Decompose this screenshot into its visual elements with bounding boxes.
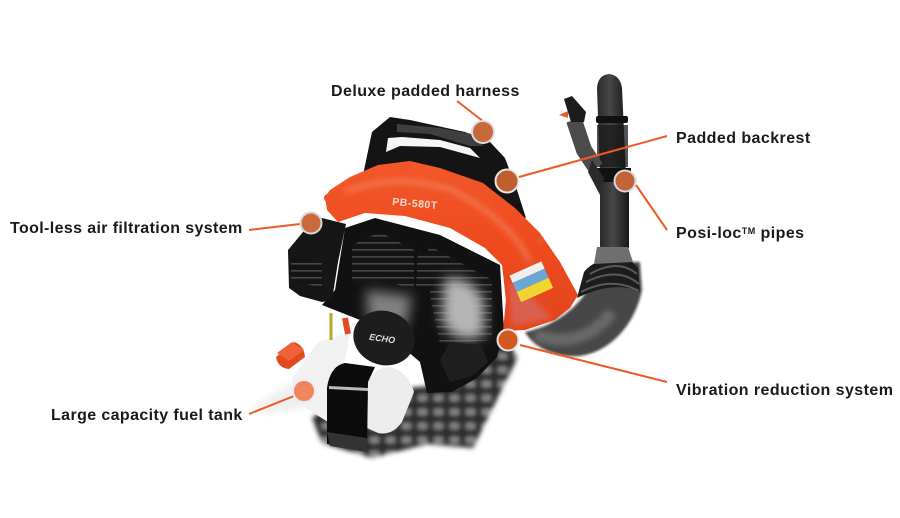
- fuel cap: [276, 342, 305, 369]
- engine shroud: [322, 218, 504, 393]
- warning label: [509, 261, 553, 302]
- callout: padded backrest: Padded backrest: [676, 130, 811, 147]
- callout: deluxe padded harness: Deluxe padded harness: [331, 83, 520, 100]
- callout: posi-loc pipes: TM: [742, 226, 756, 236]
- blower pipe and flexible elbow: [525, 74, 642, 356]
- callout: deluxe padded harness: [331, 83, 520, 143]
- callout: vibration reduction system: [498, 330, 893, 399]
- callout: large capacity fuel tank: Large capacity fuel tank: [51, 407, 243, 424]
- throttle handle: [559, 96, 604, 195]
- orange fuel line accent: [331, 313, 348, 340]
- recoil cover with ECHO logo: [346, 303, 422, 373]
- callout: posi-loc pipes: Posi-loc: [676, 225, 742, 242]
- callout: vibration reduction system: Vibration reduction system: [676, 382, 893, 399]
- blower illustration: [250, 74, 642, 458]
- callout: posi-loc pipes: pipes: [756, 225, 805, 242]
- callout: tool-less air filtration system: Tool-less air filtration system: [10, 220, 243, 237]
- callout: tool-less air filtration system: [10, 212, 322, 237]
- recoil starter housing: [288, 218, 346, 302]
- harness frame: [363, 117, 526, 218]
- callout: posi-loc pipes: [614, 170, 805, 242]
- fuel tank: [250, 333, 414, 452]
- callout: padded backrest: [496, 130, 811, 192]
- base plate: [312, 340, 518, 458]
- logo text: ECHO: [369, 332, 396, 345]
- orange blower housing: [324, 161, 578, 331]
- callout: large capacity fuel tank: [51, 380, 315, 424]
- model name: PB-580T: [392, 196, 438, 212]
